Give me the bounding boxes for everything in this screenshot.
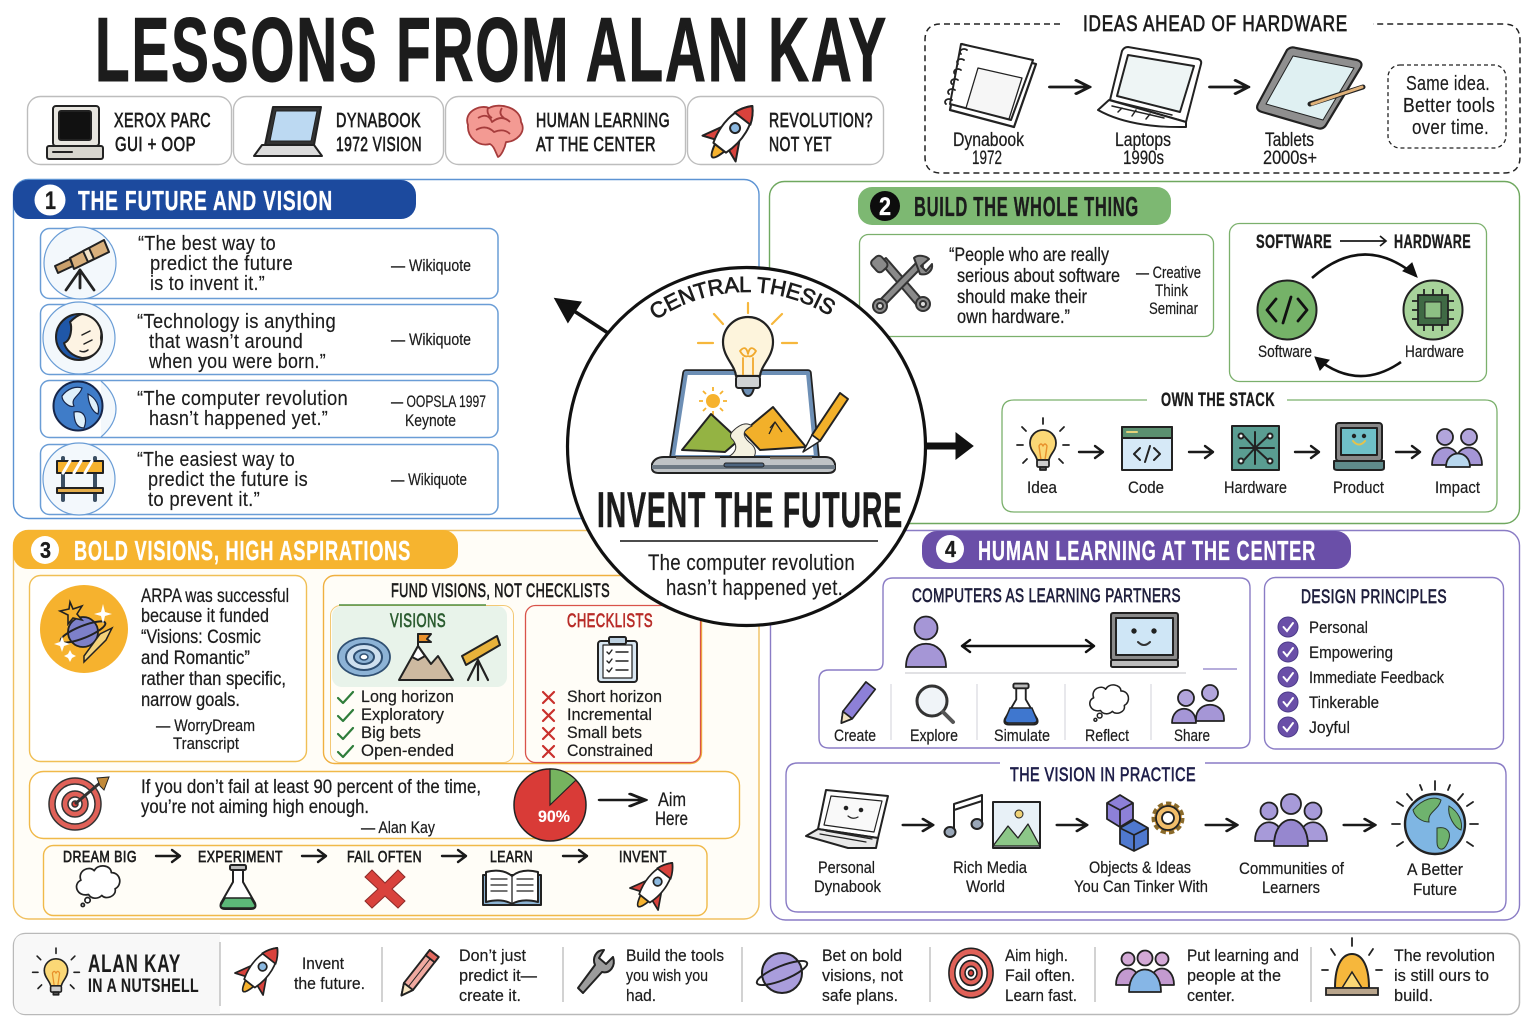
quote card: people serious about software: Seminar — [1149, 299, 1198, 318]
icon: globe — [54, 382, 102, 430]
quote card: people serious about software: Think — [1155, 281, 1188, 300]
label cell: IN A NUTSHELL — [88, 976, 199, 997]
icon: desktop computer — [47, 106, 103, 159]
card: fail 90 percent: Here — [655, 809, 688, 830]
list: empowering — [1278, 642, 1393, 662]
quote card: people serious about software: serious about software — [957, 266, 1120, 287]
item: build the tools — [578, 946, 724, 1005]
arrow: thesis to future and vision — [557, 300, 608, 333]
icon: galaxy — [338, 638, 390, 676]
card: the vision in practice: Communities of — [1239, 859, 1344, 878]
icon: better future globe — [1392, 781, 1478, 854]
label cell — [14, 934, 220, 1014]
icon: person — [906, 616, 946, 667]
panel: alan kay in a nutshell — [14, 934, 1520, 1014]
caption: learning and people: people at the — [1187, 966, 1281, 985]
arrow — [1340, 236, 1386, 246]
card: ARPA — [30, 576, 306, 762]
card: ARPA: “Visions: Cosmic — [141, 627, 261, 648]
icon: smiling monitor — [1111, 613, 1178, 667]
card: Dynabook: DYNABOOK — [336, 110, 421, 132]
list: joyful: Joyful — [1309, 718, 1350, 737]
caption: Dynabook 1972: Dynabook — [953, 130, 1024, 151]
arrow — [442, 850, 466, 862]
arrow — [1295, 446, 1319, 458]
caption: Tablets 2000s+: Tablets — [1265, 130, 1314, 151]
icon: clipboard — [598, 637, 637, 682]
quote card: technology: that wasn’t around — [149, 331, 303, 353]
pie chart: 90 percent — [514, 769, 586, 841]
quote card: easiest way to predict: predict the future is — [148, 469, 308, 491]
top highlights strip — [28, 93, 884, 170]
quote card: easiest way to predict: “The easiest way to — [137, 449, 295, 471]
card: fail 90 percent: — Alan Kay — [361, 818, 435, 837]
checklist: negatives: Small bets — [567, 723, 642, 742]
checklist: negatives: Constrained — [567, 741, 653, 760]
item: create it: create it. — [459, 986, 521, 1005]
quote card: best way to predict — [40, 227, 498, 299]
arrow — [1206, 819, 1237, 831]
icon: idea bulb — [698, 303, 797, 396]
icon: two people — [1172, 685, 1224, 723]
item: build the tools: you wish you — [626, 966, 708, 985]
card: design principles — [1264, 578, 1504, 749]
section header — [858, 187, 1171, 225]
quote card: technology — [40, 302, 498, 374]
card: ARPA: ARPA was successful — [141, 586, 289, 607]
quote card: computer revolution — [40, 380, 498, 438]
icon: open book — [483, 871, 541, 905]
checklist: visions: Long horizon — [361, 687, 454, 706]
caption: Tablets 2000s+ — [1263, 130, 1317, 169]
diagram: own the stack: OWN THE STACK — [1161, 390, 1275, 411]
arrow — [1079, 446, 1103, 458]
process: dream to invent: FAIL OFTEN — [347, 849, 422, 866]
icon: chip circle — [1404, 280, 1462, 340]
icon: rocket — [624, 852, 686, 917]
caption: learning and people: center. — [1187, 986, 1235, 1005]
quote card: people serious about software: “People who are really — [949, 245, 1109, 266]
diagram: software hardware cycle: Software — [1258, 342, 1312, 361]
card: ARPA: rather than specific, — [141, 669, 286, 690]
diagram: own the stack: Hardware — [1224, 478, 1287, 497]
list: immediate feedback — [1278, 667, 1444, 687]
card: Xerox PARC — [28, 96, 232, 164]
card: ARPA: because it funded — [141, 606, 269, 627]
icon: mountain flag — [399, 634, 453, 680]
checklist: visions: Open-ended — [361, 741, 454, 760]
card: fail 90 percent: you’re not aiming high enough. — [141, 797, 369, 818]
arrow: thesis to build the whole thing — [924, 433, 973, 459]
arrow — [903, 819, 933, 831]
quote card: easiest way to predict: to prevent it.” — [148, 489, 260, 511]
subtitle: hasn’t happened yet. — [666, 575, 843, 600]
sub-card: visions — [330, 605, 514, 762]
item: build the tools: Build the tools — [626, 946, 724, 965]
card: computers as learning partners: Simulate — [994, 726, 1050, 745]
icon: people impact — [1432, 429, 1482, 467]
icon: road barrier — [57, 458, 103, 500]
checklist: visions — [338, 687, 454, 760]
icon: dynabook laptop — [254, 107, 322, 156]
headline: INVENT THE FUTURE — [597, 482, 903, 538]
icon: tablet with stylus — [1257, 47, 1363, 129]
item: aim high — [949, 946, 1077, 1005]
panel: 3 bold visions high aspirations — [13, 530, 759, 919]
section header: 4 — [945, 536, 956, 562]
icon: flask — [220, 865, 256, 909]
list: immediate feedback: Immediate Feedback — [1309, 668, 1444, 687]
item: invent the future — [229, 937, 365, 1002]
diagram: own the stack: Product — [1333, 478, 1384, 497]
item: aim high: Aim high. — [1005, 946, 1068, 965]
caption: Laptops 1990s: 1990s — [1123, 148, 1164, 169]
icon: thought cloud — [77, 866, 120, 907]
process: dream to invent: INVENT — [619, 849, 667, 866]
item: aim high: Fail often. — [1005, 966, 1075, 985]
caption: learning and people — [1187, 946, 1299, 1005]
panel: ideas ahead of hardware — [925, 11, 1520, 173]
central thesis — [566, 266, 928, 628]
process: dream to invent: DREAM BIG — [63, 849, 137, 866]
caption: Laptops 1990s — [1115, 130, 1171, 169]
card: Human learning — [446, 96, 686, 164]
icon: product device — [1334, 423, 1384, 470]
quote card: people serious about software: — Creative — [1136, 263, 1201, 282]
diagram: own the stack: Code — [1128, 478, 1164, 497]
checklist: visions: Exploratory — [361, 705, 444, 724]
card: computers as learning partners: Share — [1174, 726, 1210, 745]
section header: BUILD THE WHOLE THING — [914, 191, 1139, 222]
card: Human learning: HUMAN LEARNING — [536, 110, 670, 132]
icon: brain — [467, 106, 523, 157]
item: aim high: Learn fast. — [1005, 986, 1077, 1005]
arrow — [1396, 446, 1420, 458]
panel: 2 build the whole thing — [770, 182, 1520, 524]
icon: idea bulb — [1017, 418, 1069, 470]
section header: 1 — [45, 187, 56, 215]
icon: music and picture — [944, 795, 1040, 848]
diagram: software hardware cycle — [1230, 224, 1486, 382]
diagram: software hardware cycle: SOFTWARE — [1256, 232, 1332, 253]
diagram: own the stack: Idea — [1027, 478, 1057, 497]
card: fail 90 percent: Aim — [658, 790, 686, 811]
quote card: best way to predict: “The best way to — [138, 233, 276, 255]
item: revolution ours to build: is still ours to — [1394, 966, 1489, 985]
diagram: own the stack: Impact — [1435, 478, 1480, 497]
item: bold visions: visions, not — [822, 966, 903, 985]
quote card: people serious about software: should make their — [957, 287, 1088, 308]
quote card: technology: when you were born.” — [148, 351, 326, 373]
card: computers as learning partners: Explore — [910, 726, 958, 745]
icon: red cross — [365, 870, 405, 908]
process: dream to invent: EXPERIMENT — [198, 849, 283, 866]
sub-card: checklists — [526, 606, 700, 762]
arrow — [1344, 819, 1375, 831]
icon: code circle — [1258, 280, 1316, 340]
card: ARPA: — WorryDream — [156, 716, 255, 735]
card: Xerox PARC: GUI + OOP — [115, 134, 196, 156]
card: Revolution — [688, 93, 884, 170]
item: bold visions: safe plans. — [822, 986, 898, 1005]
card: computers as learning partners: COMPUTERS AS LEARNING PARTNERS — [912, 586, 1181, 607]
item: create it: Don’t just — [459, 946, 526, 965]
item: create it: predict it— — [459, 966, 537, 985]
quote card: best way to predict: is to invent it.” — [150, 273, 265, 295]
caption: learning and people: Put learning and — [1187, 946, 1299, 965]
section header — [13, 530, 458, 569]
icon: crossed tools — [869, 254, 932, 313]
diagram: software hardware cycle: HARDWARE — [1394, 232, 1471, 253]
arrow — [156, 850, 180, 862]
card: Dynabook: 1972 VISION — [336, 134, 422, 156]
diagram: software hardware cycle: Hardware — [1405, 342, 1464, 361]
icon: magnifier — [917, 686, 953, 722]
curved label: CENTRAL THESIS — [650, 276, 835, 318]
list: personal — [1278, 617, 1368, 637]
item: invent the future: the future. — [294, 974, 365, 993]
icon: personal dynabook — [806, 790, 888, 848]
checklist: negatives: Short horizon — [567, 687, 662, 706]
card: the vision in practice: Dynabook — [814, 877, 881, 896]
section header: 2 — [879, 193, 891, 221]
panel: 4 human learning at the center — [770, 530, 1520, 920]
item: bold visions — [754, 946, 903, 1005]
quote card: computer revolution: Keynote — [405, 411, 456, 430]
callout: same idea: Better tools — [1403, 95, 1495, 117]
card: Human learning: AT THE CENTER — [536, 134, 656, 156]
quote card: people serious about software: own hardware.” — [957, 307, 1070, 328]
section header — [922, 531, 1351, 569]
checklist: negatives — [543, 687, 662, 760]
quote card: computer revolution: hasn’t happened yet.” — [149, 408, 328, 430]
quote card: best way to predict: — Wikiquote — [391, 256, 471, 275]
card: fail 90 percent — [30, 769, 740, 841]
list: personal: Personal — [1309, 618, 1368, 637]
item: bold visions: Bet on bold — [822, 946, 902, 965]
pie chart: 90 percent: 90% — [538, 807, 570, 826]
icon: telescope — [462, 636, 500, 680]
icon: bulb — [33, 948, 79, 995]
subtitle — [648, 550, 855, 600]
checklist: visions: Big bets — [361, 723, 421, 742]
card: the vision in practice: Objects & Ideas — [1089, 858, 1191, 877]
callout: same idea: Same idea. — [1406, 73, 1490, 95]
quote card: easiest way to predict — [40, 443, 498, 515]
process: dream to invent — [44, 846, 707, 917]
item: revolution ours to build: build. — [1394, 986, 1433, 1005]
arrow — [1210, 80, 1248, 94]
section header: BOLD VISIONS, HIGH ASPIRATIONS — [74, 535, 411, 566]
icon: flask — [1004, 684, 1038, 725]
list: tinkerable — [1278, 692, 1379, 712]
callout: same idea: over time. — [1412, 117, 1489, 139]
arrow — [600, 794, 646, 806]
icon: code window — [1122, 427, 1172, 470]
card: Revolution: REVOLUTION? — [769, 110, 873, 132]
card: fund visions not checklists: FUND VISIONS, NOT CHECKLISTS — [391, 581, 610, 602]
list: empowering: Empowering — [1309, 643, 1393, 662]
card: the vision in practice: Future — [1413, 880, 1457, 899]
icon: notebook — [945, 44, 1036, 127]
item: invent the future: Invent — [302, 954, 344, 973]
card: the vision in practice: Rich Media — [953, 858, 1027, 877]
card: computers as learning partners: Reflect — [1085, 726, 1129, 745]
card: Revolution: NOT YET — [769, 134, 832, 156]
icon: objects and gear — [1107, 795, 1182, 851]
item: revolution ours to build: The revolution — [1394, 946, 1495, 965]
checklist: negatives: Incremental — [567, 705, 652, 724]
callout: same idea — [1388, 65, 1506, 148]
quote card: computer revolution: “The computer revolution — [137, 388, 348, 410]
icon: laptop with landscape — [652, 373, 848, 473]
arrow — [1050, 80, 1090, 94]
icon: community — [1255, 794, 1327, 846]
caption: Tablets 2000s+: 2000s+ — [1263, 148, 1317, 169]
section header: HUMAN LEARNING AT THE CENTER — [978, 535, 1316, 566]
card: ARPA: Transcript — [173, 734, 239, 753]
caption: Dynabook 1972 — [953, 130, 1024, 169]
icon: pencil — [837, 682, 875, 727]
card: fail 90 percent: If you don’t fail at least 90 percent of the time, — [141, 777, 481, 798]
card: the vision in practice: Personal — [818, 858, 875, 877]
card: the vision in practice — [786, 763, 1506, 912]
quote card: best way to predict: predict the future — [150, 253, 293, 275]
section header: 3 — [40, 537, 51, 563]
card: the vision in practice: A Better — [1407, 860, 1463, 879]
icon: baby face — [56, 314, 102, 360]
quote card: technology: “Technology is anything — [137, 311, 336, 333]
list: joyful — [1278, 717, 1350, 737]
card: the vision in practice: World — [966, 877, 1005, 896]
arrow — [302, 850, 326, 862]
icon: rocket — [696, 93, 769, 170]
card: Xerox PARC: XEROX PARC — [114, 110, 211, 132]
card: computers as learning partners: Create — [834, 726, 876, 745]
card: fund visions not checklists — [324, 576, 702, 764]
subtitle: The computer revolution — [648, 550, 855, 575]
quote card: computer revolution: — OOPSLA 1997 — [391, 392, 486, 411]
section header — [13, 180, 416, 219]
icon: cosmic planet badge — [40, 585, 128, 673]
card: computers as learning partners — [819, 578, 1250, 748]
caption: Laptops 1990s: Laptops — [1115, 130, 1171, 151]
panel: 1 the future and vision — [13, 180, 759, 518]
icon: thought cloud — [1090, 685, 1128, 721]
caption: Dynabook 1972: 1972 — [972, 148, 1002, 169]
heading: IDEAS AHEAD OF HARDWARE — [1083, 11, 1348, 36]
process: dream to invent: LEARN — [490, 849, 533, 866]
arrow — [1057, 819, 1087, 831]
arrow — [1189, 446, 1213, 458]
arrow: software to hardware — [1312, 254, 1416, 278]
item: create it — [397, 946, 537, 1005]
arrow: two way — [962, 640, 1094, 652]
quote card: easiest way to predict: — Wikiquote — [391, 470, 467, 489]
card: the vision in practice: You Can Tinker With — [1074, 877, 1208, 896]
label cell: ALAN KAY — [88, 950, 181, 978]
icon: telescope — [55, 240, 109, 290]
icon: target with dart — [49, 777, 109, 830]
icon: laptop — [1098, 47, 1201, 127]
card: Dynabook — [234, 96, 444, 164]
card: design principles: DESIGN PRINCIPLES — [1301, 587, 1447, 608]
list: tinkerable: Tinkerable — [1309, 693, 1379, 712]
sub-card: checklists: CHECKLISTS — [567, 611, 653, 632]
item: build the tools: had. — [626, 986, 656, 1005]
item: revolution ours to build — [1322, 938, 1495, 1005]
title: LESSONS FROM ALAN KAY — [95, 0, 888, 101]
curved label path — [588, 292, 904, 450]
card: ARPA: and Romantic” — [141, 648, 250, 669]
quote card: people serious about software — [860, 234, 1214, 336]
section header: THE FUTURE AND VISION — [78, 185, 333, 216]
arrow — [563, 850, 587, 862]
quote card: technology: — Wikiquote — [391, 330, 471, 349]
card: the vision in practice: Learners — [1262, 878, 1320, 897]
arrow: hardware to software — [1316, 358, 1401, 376]
card: the vision in practice: THE VISION IN PRACTICE — [1010, 765, 1196, 786]
icon: circuit board — [1232, 426, 1279, 470]
sub-card: visions: VISIONS — [390, 611, 446, 632]
diagram: own the stack — [1002, 390, 1497, 512]
item: learning and people — [1116, 950, 1174, 992]
card: ARPA: narrow goals. — [141, 690, 240, 711]
